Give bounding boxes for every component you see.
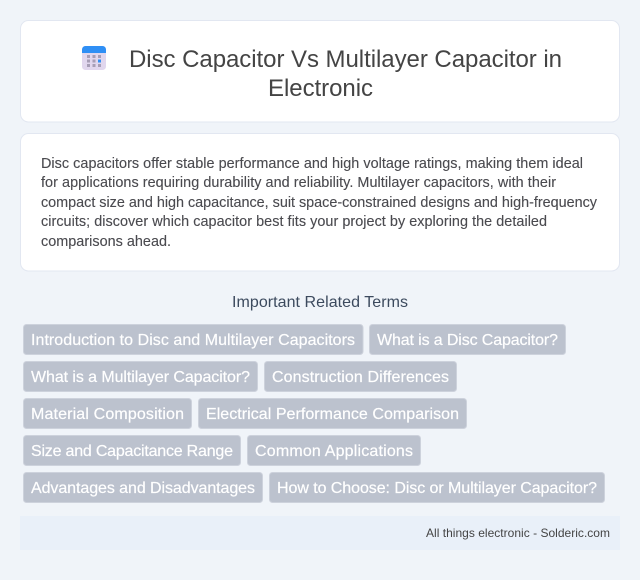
description text: comparisons ahead.: [41, 234, 171, 250]
chip: construction differences: Construction Differences: [272, 369, 449, 386]
icon: calendar grid: [82, 46, 106, 70]
description panel: [20, 134, 620, 271]
footer: [20, 516, 620, 550]
chip: how to choose: How to Choose: Disc or Multilayer Capacitor?: [277, 480, 597, 497]
title: Disc Capacitor Vs Multilayer Capacitor in: [129, 46, 562, 73]
chip: advantages: Advantages and Disadvantages: [31, 480, 255, 497]
chip: electrical performance: [198, 398, 466, 428]
description text: for applications requiring durability and reliability. Multilayer capacitors, with their: [41, 175, 556, 191]
chip: advantages: [24, 472, 262, 502]
header panel: [20, 20, 620, 122]
chip: material composition: [24, 398, 192, 428]
description text: circuits; discover which capacitor best fits your project by exploring the detailed: [41, 214, 547, 230]
chip: introduction: Introduction to Disc and Multilayer Capacitors: [31, 332, 355, 349]
chip: what is a disc capacitor: [370, 324, 566, 354]
heading: important related terms: Important Related Terms: [232, 294, 408, 311]
chip: size and capacitance range: [24, 436, 240, 466]
chip: how to choose: [270, 472, 604, 502]
description text: Disc capacitors offer stable performance and high voltage ratings, making them ideal: [41, 156, 583, 172]
chip: common applications: Common Applications: [255, 443, 413, 460]
description text: [41, 156, 598, 250]
title: Electronic: [268, 75, 373, 102]
chip: what is a multilayer capacitor: [24, 362, 258, 392]
title: [129, 46, 562, 102]
chip: material composition: Material Composition: [31, 406, 184, 423]
footer text: All things electronic - Solderic.com: [426, 526, 610, 540]
chip: what is a disc capacitor: What is a Disc Capacitor?: [377, 332, 558, 349]
related terms chips: [24, 324, 604, 502]
chip: common applications: [248, 436, 420, 466]
chip: electrical performance: Electrical Performance Comparison: [206, 406, 459, 423]
description text: compact size and high capacitance, suit space-constrained designs and high-frequency: [41, 195, 598, 211]
chip: construction differences: [264, 362, 456, 392]
chip: what is a multilayer capacitor: What is a Multilayer Capacitor?: [31, 369, 250, 386]
chip: size and capacitance range: Size and Capacitance Range: [31, 443, 233, 460]
chip: introduction: [24, 324, 363, 354]
